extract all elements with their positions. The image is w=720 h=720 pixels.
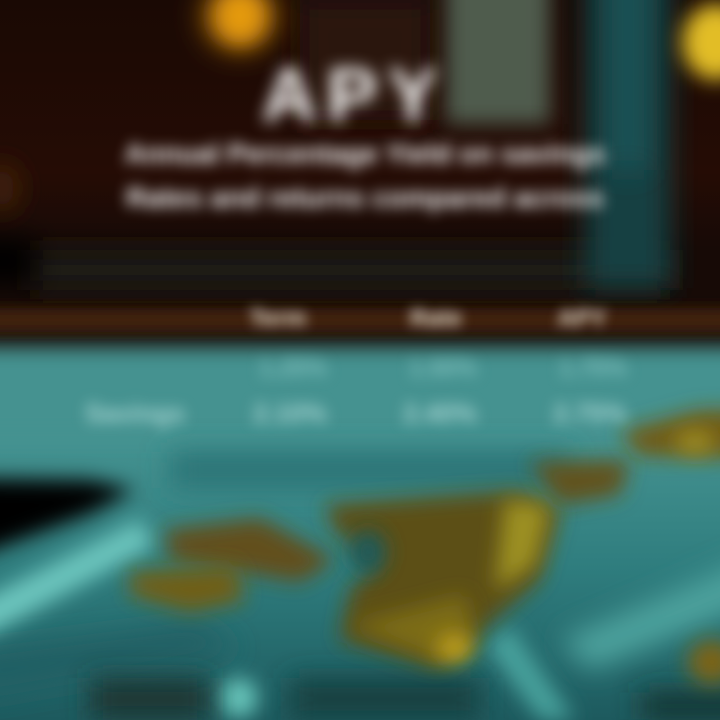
table values: Savings — [85, 398, 185, 428]
subtitle text block: Annual Percentage Yield on savings — [125, 138, 605, 169]
title: APY — [262, 53, 448, 138]
upper dark room — [0, 0, 720, 345]
table values: 1.25% — [259, 355, 327, 382]
dark shadow blob — [0, 478, 135, 566]
bottom shadows — [90, 678, 720, 720]
table values — [80, 354, 631, 433]
table header labels — [244, 301, 612, 334]
table header labels: Term — [250, 305, 306, 332]
table header labels: APY — [557, 305, 607, 332]
teal column — [586, 0, 670, 288]
table values: 1.75% — [559, 355, 627, 382]
gold coins pile — [130, 410, 720, 684]
subtitle text block: Rates and returns compared across — [126, 182, 604, 213]
small amber glow — [0, 166, 16, 210]
table header labels: Rate — [410, 305, 462, 332]
grey-green window panel — [446, 0, 550, 124]
yellow bokeh light — [682, 4, 720, 80]
subtitle text block — [117, 134, 613, 220]
table values: 2.40% — [403, 398, 477, 428]
table values: 2.10% — [253, 398, 327, 428]
table values: 2.75% — [553, 398, 627, 428]
teal water surface — [0, 308, 720, 720]
table values: 1.50% — [409, 355, 477, 382]
orange bokeh light — [202, 0, 278, 52]
